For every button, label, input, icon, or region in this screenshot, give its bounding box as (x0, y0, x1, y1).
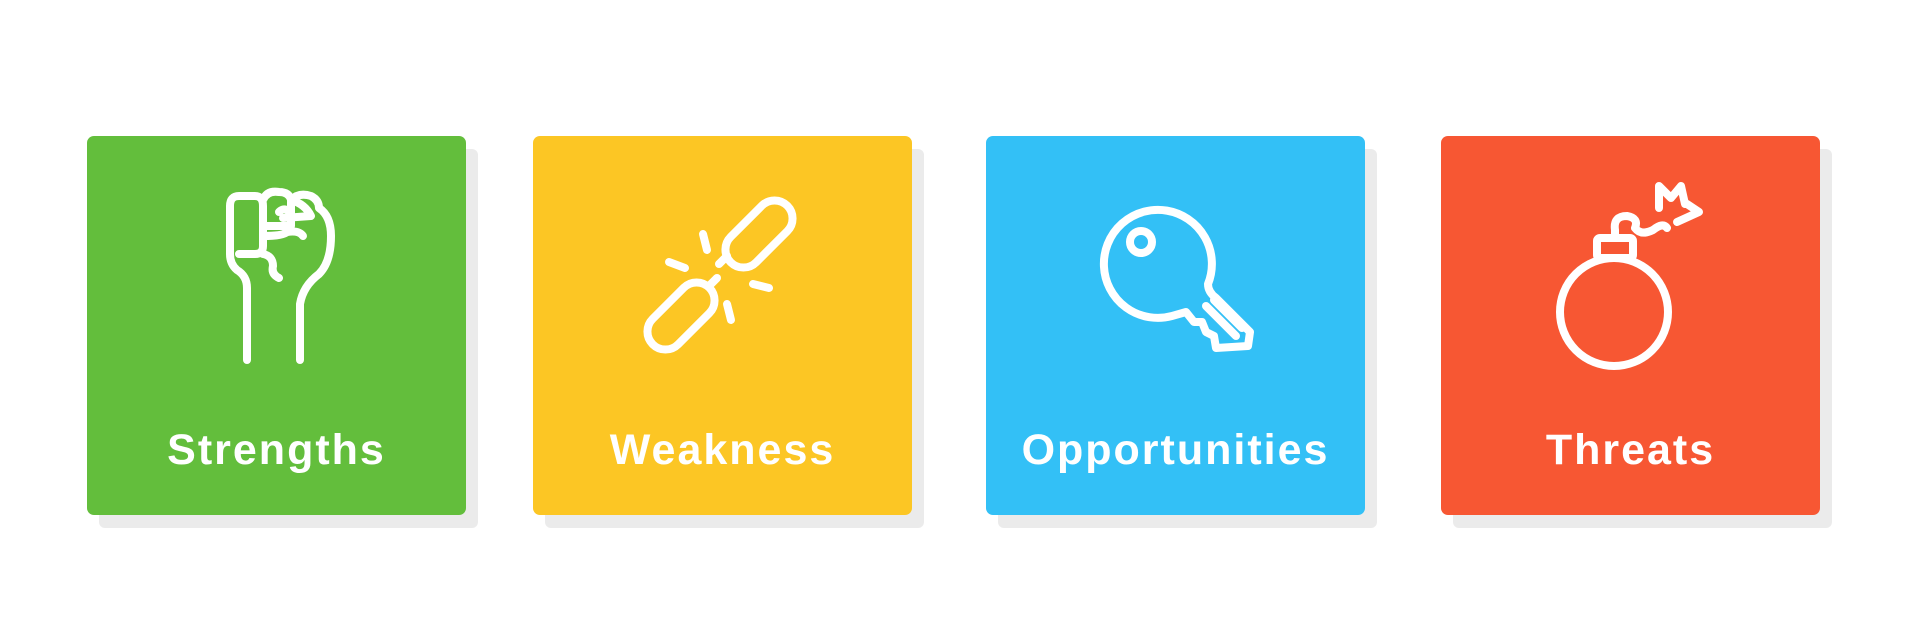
panel: opportunities (986, 136, 1377, 528)
icon: fist (226, 188, 335, 364)
label: Strengths: Strengths (167, 426, 386, 474)
panel: weakness (533, 136, 924, 528)
panel: threats (1441, 136, 1832, 528)
label: Weakness: Weakness (610, 426, 835, 474)
icon: key (1100, 206, 1254, 352)
panel: strengths (87, 136, 478, 528)
icon: bomb (1556, 182, 1703, 370)
label: Threats: Threats (1546, 426, 1715, 474)
icon: broken chain (643, 196, 797, 354)
label: Opportunities: Opportunities (1022, 426, 1329, 474)
